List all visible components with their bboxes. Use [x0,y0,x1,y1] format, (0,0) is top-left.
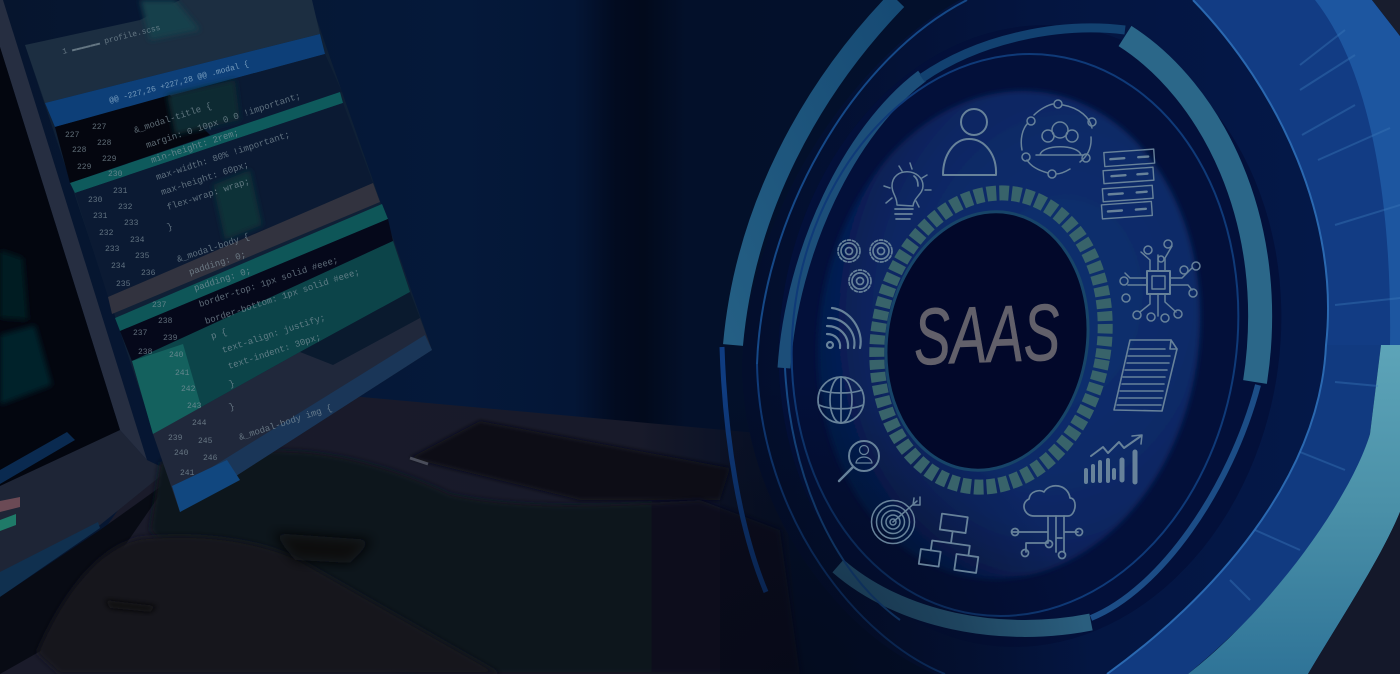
code text: 227 [92,123,107,132]
arc: ring B left [784,76,922,368]
dark row [120,219,393,361]
code text: 228 [72,146,87,155]
icon: flowchart [919,511,984,573]
code text: &_modal-body { [176,232,251,265]
mid rows [75,103,373,297]
code text: 241 [180,469,195,478]
code text: 238 [138,348,153,357]
icon: team network [1021,100,1096,178]
code text: border-bottom: 1px solid #eee; [204,267,361,327]
code text: 243 [187,402,202,411]
code text: max-width: 80% !important; [155,130,291,183]
code text: 239 [168,434,183,443]
arc: outer left [733,0,897,345]
outer ring band, lower right [1107,345,1381,674]
code text: 246 [203,454,218,463]
icon: light bulb [884,163,931,219]
icon: globe [818,377,864,423]
code text: padding: 0; [193,266,252,294]
green row 2 [115,204,388,331]
arc: ring B bottom [838,566,1091,628]
code text: 242 [181,385,196,394]
arc: inner thin [785,368,900,620]
desk surface [0,395,800,674]
arc: ring B top [922,28,1125,78]
code text: 229 [102,155,117,164]
code text: 240 [169,351,184,360]
code text: 1 ▬▬▬▬▬▬ profile.scss [62,24,162,57]
dark centre lens [866,196,1108,486]
code text: 227 [65,131,80,140]
icon: cloud network [1012,486,1082,558]
lower rows [153,318,432,512]
code text: border-top: 1px solid #eee; [198,255,340,310]
code text: &_modal-title { [133,101,213,136]
bottom right corner [1308,512,1400,674]
code text: 235 [135,252,150,261]
lower left shading [720,380,1090,674]
pinkish row [108,183,380,314]
code text: 235 [116,280,131,289]
code text: 233 [105,245,120,254]
code text: 236 [141,269,156,278]
code text: 238 [158,317,173,326]
arc: ring B lower right [1091,385,1258,618]
code text: max-height: 60px; [160,160,250,198]
teal crescent [1188,345,1400,674]
code text: 230 [108,170,123,179]
code text: 244 [192,419,207,428]
code text [62,24,361,478]
ring arcs [722,0,1328,674]
code text: 230 [88,196,103,205]
code text: } [228,402,236,413]
icon: person [943,109,996,175]
radial tick marks [1230,30,1400,600]
icon: server rack [1098,149,1158,219]
floating code panel [25,0,432,512]
blue header row [45,34,325,127]
icon: circuit chip [1120,240,1200,322]
code text: 237 [152,301,167,310]
code text: min-height: 2rem; [150,128,240,166]
code text: 240 [174,449,189,458]
code text: 239 [163,334,178,343]
code text: 234 [130,236,145,245]
code text: 237 [133,329,148,338]
segmented ring [854,175,1128,505]
icon: search user [839,441,879,481]
hands [37,450,800,674]
code text: } [228,379,236,390]
code text: } [166,222,174,233]
icon: document [1114,340,1177,411]
icon: wifi signal [827,308,861,348]
icon: target [872,497,920,544]
code text: 229 [77,163,92,172]
icons [818,100,1200,573]
laptop screen and base [0,0,170,674]
code text: 241 [175,369,190,378]
icon: growth chart [1086,435,1142,482]
code text: 233 [124,219,139,228]
code text: p { [210,327,228,342]
code text: 232 [118,203,133,212]
code text: text-indent: 30px; [227,332,322,372]
arc: thin outer [757,0,967,364]
middle ring field [742,0,1328,674]
inner blue disc [787,66,1231,604]
outer ring band, upper right [1193,0,1400,345]
code text: 228 [97,139,112,148]
title: SAAS: SAAS [912,287,1061,382]
code text: 232 [99,229,114,238]
code text: padding: 0; [188,250,247,278]
green block [132,241,410,434]
code text: text-align: justify; [221,313,327,356]
code text: flex-wrap: wrap; [166,177,251,213]
code text: 234 [111,262,126,271]
ring B field [739,0,1321,674]
icon: gears [838,240,892,292]
dark rows [55,54,342,183]
code text: @@ -227,26 +227,28 @@ .modal { [108,60,250,106]
code text: 231 [113,187,128,196]
code text: &_modal-body img { [238,403,333,443]
code text: margin: 0 10px 0 0 !important; [145,91,302,151]
code text: 245 [198,437,213,446]
tablet on desk [410,421,730,500]
arc: ring B right [1125,36,1260,382]
green row 1 [70,92,343,193]
code text: 231 [93,212,108,221]
